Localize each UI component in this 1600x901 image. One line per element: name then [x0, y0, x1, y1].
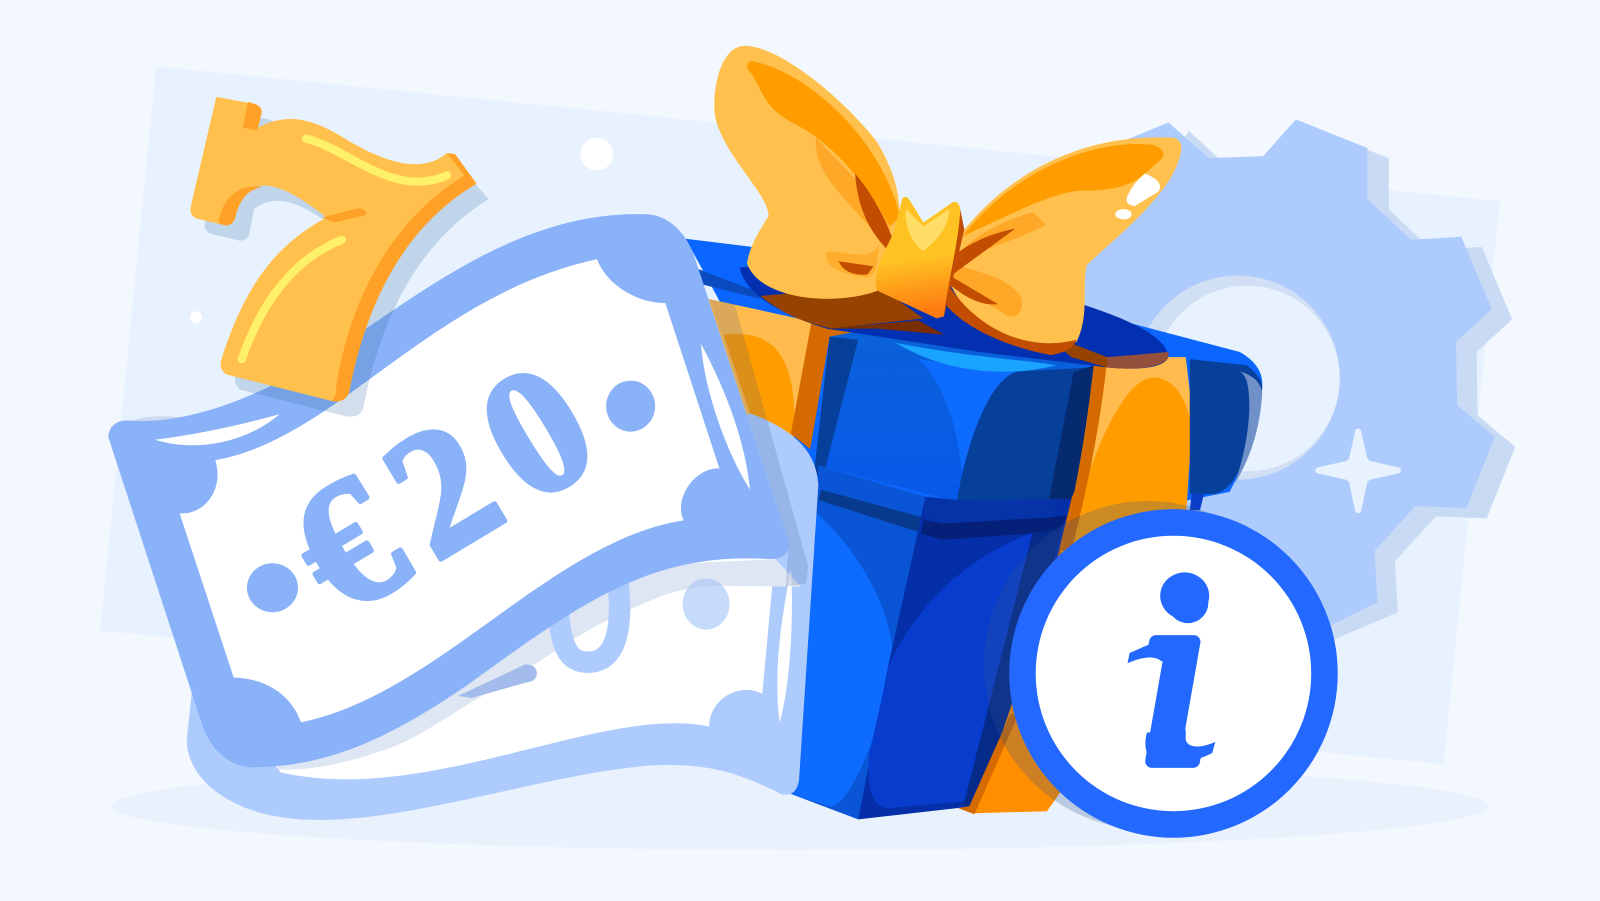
box lid top [686, 239, 1262, 525]
bow right wing creases [947, 229, 1077, 355]
bow left wing inner [747, 61, 900, 227]
ground shadow [111, 762, 1489, 850]
seven small shades [218, 102, 366, 225]
info letter: i [1137, 530, 1210, 818]
bow knot [876, 197, 964, 318]
bow shine [1115, 173, 1160, 219]
info bottom tail [1145, 730, 1215, 766]
front bill [108, 214, 789, 767]
bow left wing [714, 46, 899, 299]
box lower right face [858, 497, 1071, 819]
bill dot left [247, 563, 298, 612]
seven body [190, 97, 474, 401]
ribbon right filler [1051, 367, 1097, 571]
bill shadow band [709, 299, 808, 587]
icon: gear [1020, 119, 1515, 643]
ghost dot [683, 579, 730, 630]
info dot accent [1160, 572, 1209, 619]
icon: info badge [1009, 509, 1338, 838]
icon: lucky seven [190, 97, 489, 417]
info circle shadow [984, 501, 1312, 830]
background panel [100, 66, 1500, 764]
bow right wing folds [951, 212, 1046, 317]
bow right wing inner [962, 144, 1164, 237]
front bill white area [180, 259, 719, 722]
lid right side [1190, 359, 1262, 494]
seven right shade [332, 153, 477, 401]
bow left lower crease [839, 261, 873, 275]
ghost zero [558, 577, 620, 662]
bow shadow [740, 255, 1169, 369]
bill ghost edge [133, 416, 189, 422]
bow [714, 46, 1181, 355]
front bill shadow [276, 559, 801, 770]
info top flag [1128, 638, 1197, 663]
ribbon left side [704, 298, 918, 449]
white sliver right [701, 344, 750, 490]
box lower left face [791, 465, 957, 819]
white sliver top left [155, 414, 280, 445]
box lid front [813, 324, 1094, 510]
bill amount: €20 [258, 312, 643, 653]
decorative dots [190, 138, 613, 323]
bow left wing fold [816, 138, 890, 245]
icon: sparkle [1318, 432, 1398, 510]
front bill body [108, 214, 789, 767]
gift box [686, 239, 1262, 819]
ghost stroke [458, 664, 537, 698]
lid left strip [694, 267, 760, 299]
bow right wing [951, 137, 1181, 347]
bill dot right [606, 381, 655, 432]
seven highlights [242, 139, 447, 359]
back bill body [187, 413, 818, 820]
ribbon right and bottom [958, 357, 1192, 814]
back bill white area [194, 551, 776, 779]
back bill sliver [777, 569, 792, 722]
bow left wing crease [855, 173, 893, 250]
bow left lower fold [826, 245, 880, 278]
seven shadow [205, 112, 489, 417]
back bill [187, 413, 818, 820]
